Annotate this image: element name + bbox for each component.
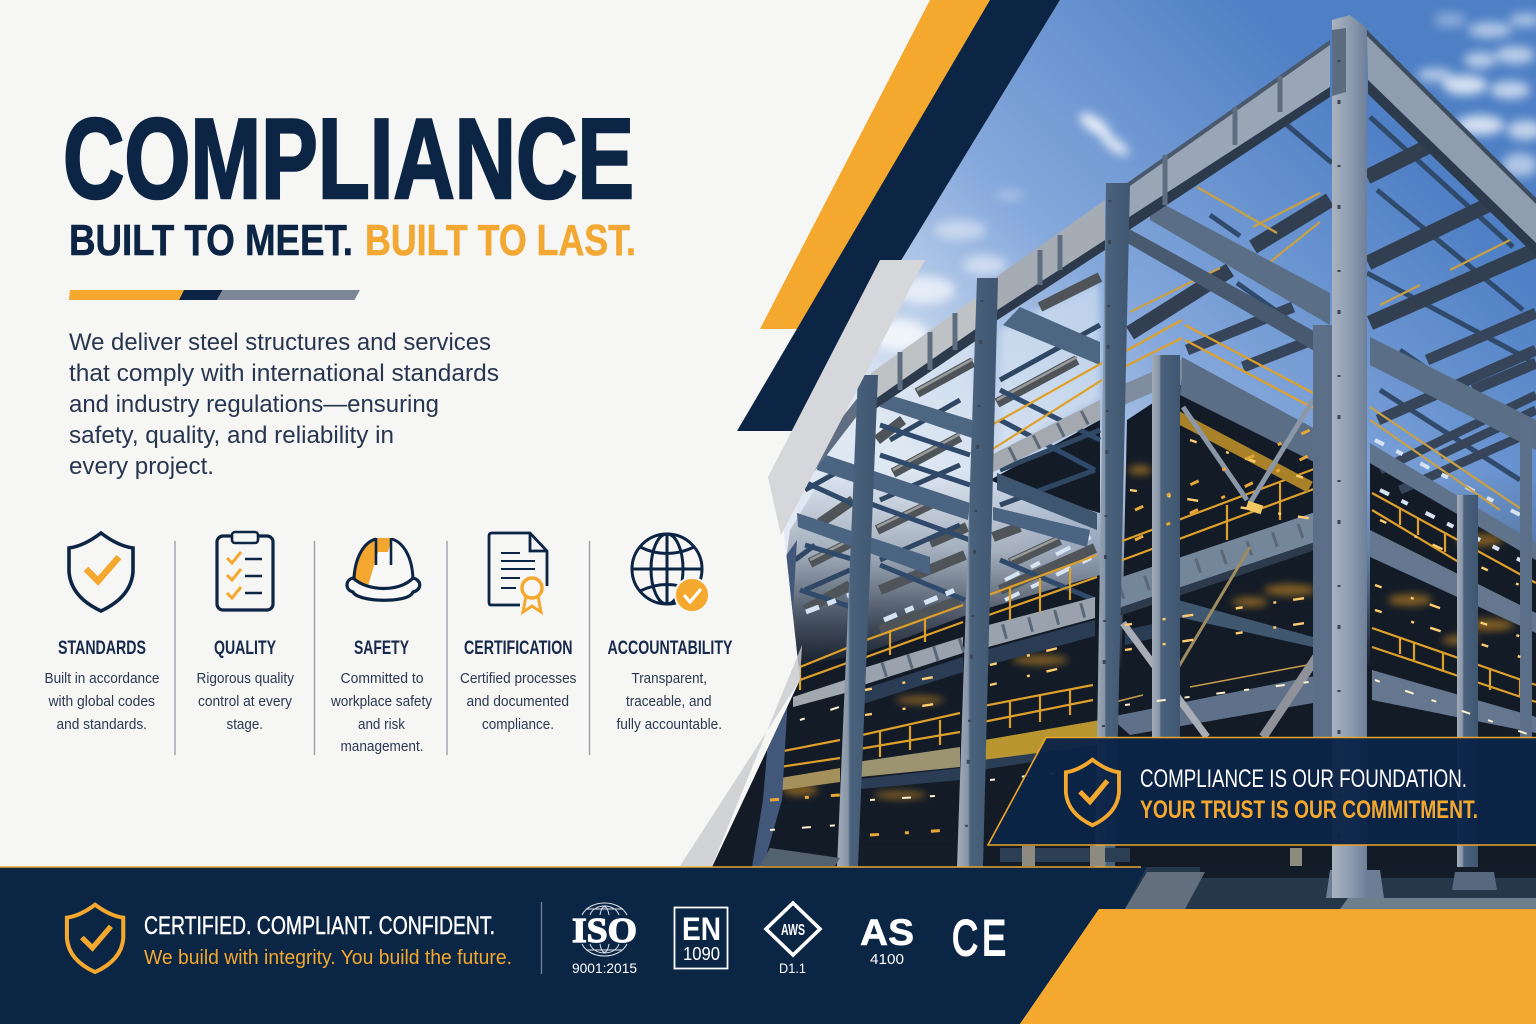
top perimeter beam	[800, 30, 1536, 490]
interior lower dark mass	[700, 385, 1536, 867]
interior shadow	[754, 481, 1536, 909]
text: standards: Built in accordance	[44, 671, 160, 687]
translucent grey lower stripe	[680, 645, 802, 866]
navy diagonal stripe	[737, 0, 1060, 431]
subtitle: navy part: BUILT TO MEET.	[69, 216, 353, 265]
text: certification	[460, 671, 576, 733]
intro paragraph: safety, quality, and reliability in	[69, 422, 394, 449]
yellow safety railings	[773, 320, 1536, 778]
roof yellow railings	[1130, 187, 1527, 513]
badge: AWS D1.1: AWS	[781, 922, 805, 939]
icon: callout shield	[1066, 760, 1119, 825]
icon: certificate document	[489, 533, 547, 612]
badge: EN 1090	[674, 908, 728, 968]
badge: AS 4100	[860, 912, 914, 968]
title: COMPLIANCE: COMPLIANCE	[63, 96, 634, 223]
panel: quality	[196, 532, 295, 733]
text: certification: and documented	[466, 694, 569, 710]
subtitle: orange part: BUILT TO LAST.	[365, 216, 636, 265]
text: safety	[330, 671, 433, 755]
text: safety: management.	[340, 739, 424, 755]
text: accountability: traceable, and	[626, 694, 712, 710]
badge: EN 1090: EN	[682, 911, 721, 947]
footer tagline: We build with integrity. You build the future.	[144, 947, 512, 969]
heading: accountability: ACCOUNTABILITY	[608, 637, 732, 659]
grey diagonal stripe	[768, 260, 925, 535]
text: safety: workplace safety	[330, 694, 433, 710]
orange diagonal stripe	[760, 0, 990, 329]
text: quality: control at every	[198, 694, 293, 710]
badge: CE mark	[952, 910, 1006, 966]
heading: certification: CERTIFICATION	[464, 637, 572, 659]
cross bracing	[1123, 400, 1330, 737]
orange corner block	[1020, 909, 1536, 1024]
floor bands	[768, 359, 1536, 792]
footer heading: CERTIFIED. COMPLIANT. CONFIDENT.	[144, 912, 495, 940]
icon: shield with check	[69, 533, 133, 611]
roof grid beams	[795, 117, 1536, 630]
callout banner	[988, 738, 1536, 845]
icon: clipboard checklist	[217, 532, 273, 610]
heading: standards: STANDARDS	[58, 637, 146, 659]
text: safety: Committed to	[340, 671, 424, 687]
text: certification: Certified processes	[460, 671, 576, 687]
panel: accountability	[608, 534, 732, 733]
footer band	[0, 867, 1536, 1024]
clouds	[872, 13, 1536, 351]
badge: AWS D1.1	[766, 903, 820, 976]
text: standards	[44, 671, 160, 733]
pale sky through left bays	[908, 282, 1104, 446]
sky slits seen through lower floors	[806, 440, 1530, 620]
text: accountability: fully accountable.	[616, 717, 722, 733]
photo: steel structure under construction	[700, 0, 1536, 910]
intro paragraph: every project.	[69, 453, 214, 480]
translucent footer accent	[1125, 872, 1205, 909]
subtitle	[69, 216, 636, 265]
text: standards: and standards.	[56, 717, 147, 733]
callout text	[1140, 765, 1478, 824]
column dividers	[175, 541, 590, 755]
icon: footer shield	[67, 905, 123, 972]
badge: EN 1090: 1090	[683, 944, 720, 964]
text: accountability: Transparent,	[632, 671, 707, 687]
text: accountability	[616, 671, 722, 733]
badge: ISO 9001:2015: ISO	[572, 911, 637, 950]
intro paragraph: We deliver steel structures and services	[69, 329, 491, 356]
accent rule	[69, 290, 360, 300]
text: safety: and risk	[358, 717, 406, 733]
warm interior glow	[782, 465, 1514, 799]
badge: AWS D1.1: D1.1	[779, 960, 806, 976]
text: quality: Rigorous quality	[196, 671, 295, 687]
heading: quality: QUALITY	[214, 637, 276, 659]
badge: AS 4100: 4100	[870, 952, 904, 968]
interior lights	[770, 430, 1530, 835]
panel: certification	[460, 533, 576, 733]
wide blue beams	[797, 197, 1536, 790]
badge: ISO 9001:2015: 9001:2015	[572, 960, 637, 976]
badge: AS 4100: AS	[860, 912, 914, 953]
intro paragraph: that comply with international standards	[69, 360, 499, 387]
intro paragraph	[69, 329, 499, 480]
badge: ISO 9001:2015	[572, 903, 637, 976]
intro paragraph: and industry regulations—ensuring	[69, 391, 439, 418]
sky	[784, 0, 1536, 650]
icon: hard hat	[347, 538, 420, 600]
text: certification: compliance.	[482, 717, 554, 733]
columns	[752, 15, 1532, 898]
text: standards: with global codes	[48, 694, 155, 710]
icon: globe with check	[632, 534, 709, 612]
badge: CE mark: C	[952, 910, 978, 966]
panel: safety	[330, 538, 433, 755]
text: quality: stage.	[226, 717, 263, 733]
panel: standards	[44, 533, 160, 733]
ground floor	[760, 845, 1536, 909]
text: quality	[196, 671, 295, 733]
heading: safety: SAFETY	[354, 637, 409, 659]
badge: CE mark: E	[982, 910, 1006, 966]
